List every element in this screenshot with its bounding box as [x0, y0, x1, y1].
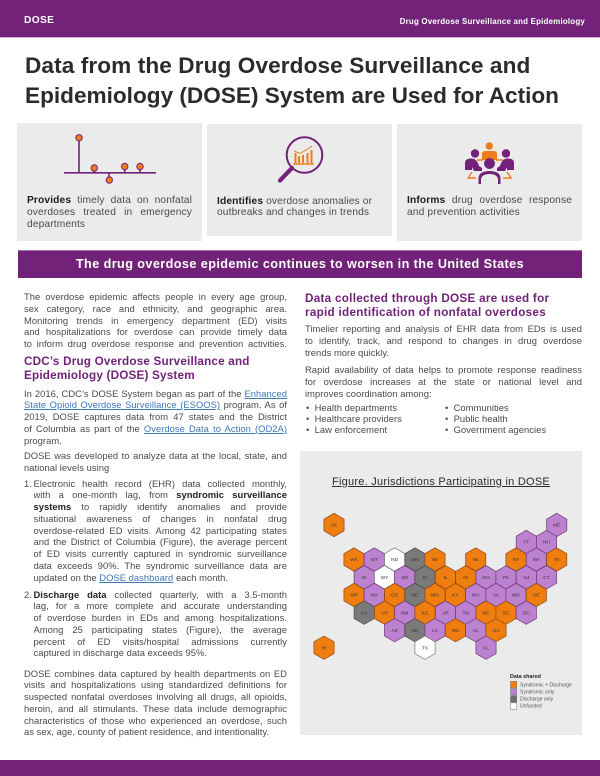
provides text: departments	[27, 219, 85, 230]
icon: spike timeline	[64, 134, 156, 184]
hex map: AL	[473, 628, 479, 634]
list item 2: Discharge data collected quarterly, with a 3.5-month	[34, 588, 287, 600]
list item 2: lag, for a more complete and accurate understanding	[34, 600, 287, 611]
paragraph: combined data: characteristics of those who experienced an overdose, such	[24, 714, 287, 726]
hex map: MT	[371, 557, 378, 563]
hex map: FL	[483, 645, 489, 651]
hex map: NJ	[523, 575, 530, 581]
hex map: NY	[513, 557, 520, 563]
bullet list left	[306, 403, 402, 435]
paragraph: rapid availability: Rapid availability of data helps to promote response readiness	[305, 364, 582, 375]
heading: CDC system: Epidemiology (DOSE) System	[24, 369, 195, 382]
title: Epidemiology (DOSE) System are Used for Action	[25, 82, 559, 108]
informs text	[407, 195, 572, 218]
list item 1: of ED visits currently captured in syndromic surveillance	[34, 548, 287, 559]
hex map: OH	[482, 575, 490, 581]
hex map: AK	[331, 523, 338, 529]
hex map: NM	[401, 610, 408, 616]
hex map: WA	[350, 557, 359, 563]
hex map: MS	[452, 628, 459, 634]
paragraph: levels: DOSE was developed to analyze data at the local, state, and	[24, 450, 287, 461]
hex map: DE	[533, 593, 540, 599]
hex map: NE	[412, 593, 418, 599]
hex map: RI	[554, 557, 559, 563]
hex map: ND	[391, 557, 399, 563]
icon: magnifier with chart	[278, 136, 324, 183]
hex map: CT	[543, 575, 550, 581]
banner: The drug overdose epidemic continues to worsen in the United States	[76, 257, 524, 271]
hex map: VT	[523, 540, 529, 546]
header bar	[0, 0, 600, 38]
identifies text: outbreaks and changes in trends	[217, 207, 369, 218]
paragraph: program history: State Opioid Overdose Surveillance (ESOOS) program. As of	[24, 399, 287, 410]
list item 2	[24, 588, 287, 658]
list item 1: systems to rapidly identify anomalies and provide	[34, 501, 287, 512]
hex map: HI	[322, 645, 326, 651]
hex map: CA	[361, 610, 368, 616]
intro paragraph: sex category, race and ethnicity, and geographic area.	[24, 303, 287, 314]
header subtitle: Drug Overdose Surveillance and Epidemiology	[400, 16, 585, 26]
paragraph: rapid availability	[305, 364, 582, 399]
panel: figure	[300, 451, 582, 735]
heading: rapid identification	[305, 292, 549, 318]
paragraph: timelier reporting: trends more quickly.	[305, 346, 389, 358]
hex map: NC	[483, 610, 490, 616]
hex map: UT	[381, 610, 388, 616]
list item 1: Electronic health record (EHR) data collected monthly,	[34, 478, 287, 488]
list item 2: of overdose burden in EDs and among hospitalizations.	[34, 612, 287, 623]
identifies text: Identifies overdose anomalies or	[217, 196, 372, 206]
hex map: MO	[431, 593, 439, 599]
hex map: SC	[503, 610, 510, 616]
bullet list right	[445, 403, 546, 435]
paragraph: combined data: as sex, age, county of patient residence, and intentionality.	[24, 726, 269, 737]
provides text: overdoses treated in emergency	[27, 207, 192, 218]
hex map: ID	[362, 575, 367, 581]
heading: rapid identification: rapid identification of nonfatal overdoses	[305, 306, 546, 318]
panel: provides	[17, 123, 202, 241]
intro paragraph: and hospitalizations for overdose can provide timely data	[24, 326, 287, 337]
hex map	[314, 512, 568, 660]
title	[25, 53, 559, 108]
hex map: NH	[543, 540, 550, 546]
hex map: AZ	[392, 628, 398, 634]
hex map: KY	[452, 593, 459, 599]
title: Data from the Drug Overdose Surveillance and	[25, 53, 530, 78]
legend: Data shared	[510, 674, 541, 680]
intro paragraph: to inform drug overdose response and prevention activities.	[24, 338, 287, 349]
heading: CDC system	[24, 355, 250, 382]
list item 1: with a one-month lag, from syndromic surveillance	[34, 489, 287, 500]
list item 1: and the District of Columbia (Figure), the average percent	[34, 536, 287, 547]
paragraph: combined data	[24, 668, 287, 737]
hex map: OR	[350, 593, 358, 599]
informs text: and prevention activities	[407, 207, 520, 218]
hex map: OK	[412, 628, 419, 634]
intro paragraph: The overdose epidemic affects people in every age group,	[24, 291, 287, 302]
hex map: NV	[371, 593, 378, 599]
intro paragraph	[24, 291, 287, 349]
paragraph: program history: of Columbia as part of the Overdose Data to Action (OD2A)	[24, 423, 287, 434]
panel: informs	[397, 124, 582, 241]
heading: CDC system: CDC’s Drug Overdose Surveillance and	[24, 355, 250, 368]
hex map: VA	[493, 593, 500, 599]
hex map: SD	[401, 575, 409, 581]
hex map: KS	[422, 610, 428, 616]
provides text	[27, 195, 192, 230]
informs text: Informs drug overdose response	[407, 195, 572, 206]
list item 1	[24, 478, 287, 583]
intro paragraph: Monitoring trends in emergency department (ED) visits	[24, 314, 287, 326]
paragraph: levels	[24, 450, 287, 473]
hex map: WI	[432, 557, 438, 563]
hex map: IA	[423, 575, 428, 581]
paragraph: program history: In 2016, CDC’s DOSE System began as part of the Enhanced	[24, 388, 287, 398]
paragraph: timelier reporting: to identify, track, and respond to changes in drug overdose	[305, 335, 582, 346]
list item 2: percent of ED visits/hospital admissions currently	[34, 636, 287, 646]
panel: identifies	[207, 124, 392, 236]
hex map: CO	[391, 593, 398, 599]
legend: Discharge only	[520, 696, 554, 702]
list item 1: 1.	[24, 478, 32, 488]
paragraph: program history: 2019, DOSE captures data from 47 states and the District	[24, 411, 287, 422]
hex map: DC	[523, 610, 530, 616]
hex map: TN	[462, 610, 469, 616]
heading: rapid identification: Data collected through DOSE are used for	[305, 292, 549, 304]
list item 2: captured in discharge data exceeds 95%.	[34, 647, 207, 658]
hex map: GA	[493, 628, 500, 634]
hex map: ME	[553, 523, 560, 529]
legend: Unfunded	[520, 704, 542, 710]
paragraph: combined data: DOSE combines data captured by health departments on ED	[24, 668, 287, 678]
paragraph: combined data: heroin, and all stimulants. These data include demographic	[24, 703, 287, 714]
hex map: MI	[473, 557, 478, 563]
hex map: MD	[512, 593, 520, 599]
identifies text	[217, 196, 372, 218]
paragraph: combined data: visits and hospitalizations using standardized definitions for	[24, 679, 287, 690]
paragraph: program history	[24, 388, 287, 446]
banner	[18, 250, 582, 278]
hex map: MA	[533, 557, 541, 563]
icon: meeting group	[465, 142, 514, 184]
legend	[510, 674, 572, 710]
legend: Syndromic only	[520, 690, 555, 696]
paragraph: program history: program.	[24, 434, 62, 446]
paragraph: timelier reporting: Timelier reporting and analysis of EHR data from EDs is used	[305, 323, 582, 334]
list item 1: updated on the DOSE dashboard each month.	[34, 572, 228, 582]
header brand: DOSE	[24, 14, 54, 26]
list item 1: situational awareness of changes in nonfatal drug	[34, 513, 287, 524]
paragraph: combined data: suspected nonfatal overdoses involving all drugs, all opioids,	[24, 691, 287, 702]
hex map: MN	[411, 557, 419, 563]
list item 2: Among 25 participating states (Figure), the average	[34, 624, 287, 635]
list item 1: data exceeds 90%. The syndromic surveillance data are	[34, 560, 287, 571]
hex map: IN	[463, 575, 469, 581]
provides text: Provides timely data on nonfatal	[27, 195, 192, 206]
list item 2: 2.	[24, 588, 32, 600]
paragraph: rapid availability: improves coordination among:	[305, 388, 432, 398]
figure title: Figure. Jurisdictions Participating in DOSE	[332, 476, 550, 488]
paragraph: rapid availability: for overdose increases at the state or national level and	[305, 376, 582, 387]
paragraph: timelier reporting	[305, 323, 582, 358]
hex map: AR	[442, 610, 449, 616]
footer bar	[0, 760, 600, 776]
legend: Syndromic + Discharge	[520, 682, 572, 688]
hex map: WV	[472, 593, 480, 599]
hex map: TX	[422, 645, 429, 651]
hex map: IL	[443, 575, 448, 581]
paragraph: levels: national levels using	[24, 462, 109, 473]
hex map: LA	[432, 628, 439, 634]
hex map: WY	[381, 575, 389, 581]
hex map: PA	[503, 575, 510, 581]
list item 1: overdose-related ED visits. Among 42 participating states	[34, 524, 287, 536]
